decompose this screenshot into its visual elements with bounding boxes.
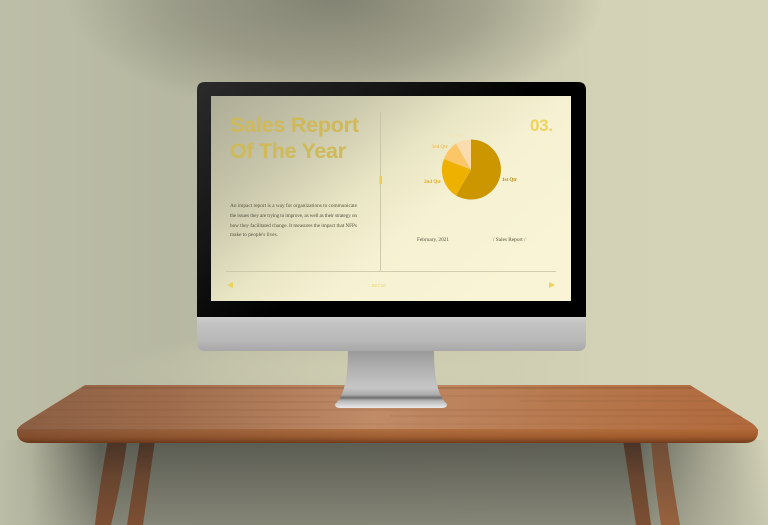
slide footer labels — [417, 237, 526, 243]
monitor bezel — [197, 82, 586, 317]
body text — [230, 202, 358, 238]
table top — [17, 385, 758, 443]
slide dividers — [226, 112, 556, 272]
pie labels: 3rd Qtr — [432, 145, 449, 150]
body text: how they facilitated change. It measures the impact that NFPs — [230, 222, 357, 229]
divider marker — [380, 176, 382, 184]
pie labels: 4th Qtr — [448, 134, 465, 139]
table front edge — [17, 429, 758, 443]
pie labels: 2nd Qtr — [424, 180, 442, 185]
body text: make to people's lives. — [230, 232, 278, 238]
pie labels — [424, 134, 518, 185]
slide title: Of The Year — [230, 139, 347, 163]
pie chart — [424, 134, 518, 199]
pie labels: 1st Qtr — [502, 178, 518, 183]
slide footer labels: / Sales Report / — [493, 237, 526, 243]
slide title: Sales Report — [230, 113, 359, 137]
monitor chin — [197, 317, 586, 351]
screen — [211, 96, 571, 301]
navigation arrows and page count: 02 / 10 — [372, 283, 386, 288]
body text: the issues they are trying to improve, as well as their strategy on — [230, 213, 357, 219]
monitor stand — [335, 351, 447, 408]
navigation arrows and page count — [227, 282, 555, 288]
slide title — [230, 113, 359, 163]
slide footer labels: February, 2021 — [417, 237, 449, 243]
body text: An impact report is a way for organizations to communicate — [230, 202, 358, 209]
table legs — [95, 440, 680, 525]
slide number: 03. — [530, 116, 553, 135]
